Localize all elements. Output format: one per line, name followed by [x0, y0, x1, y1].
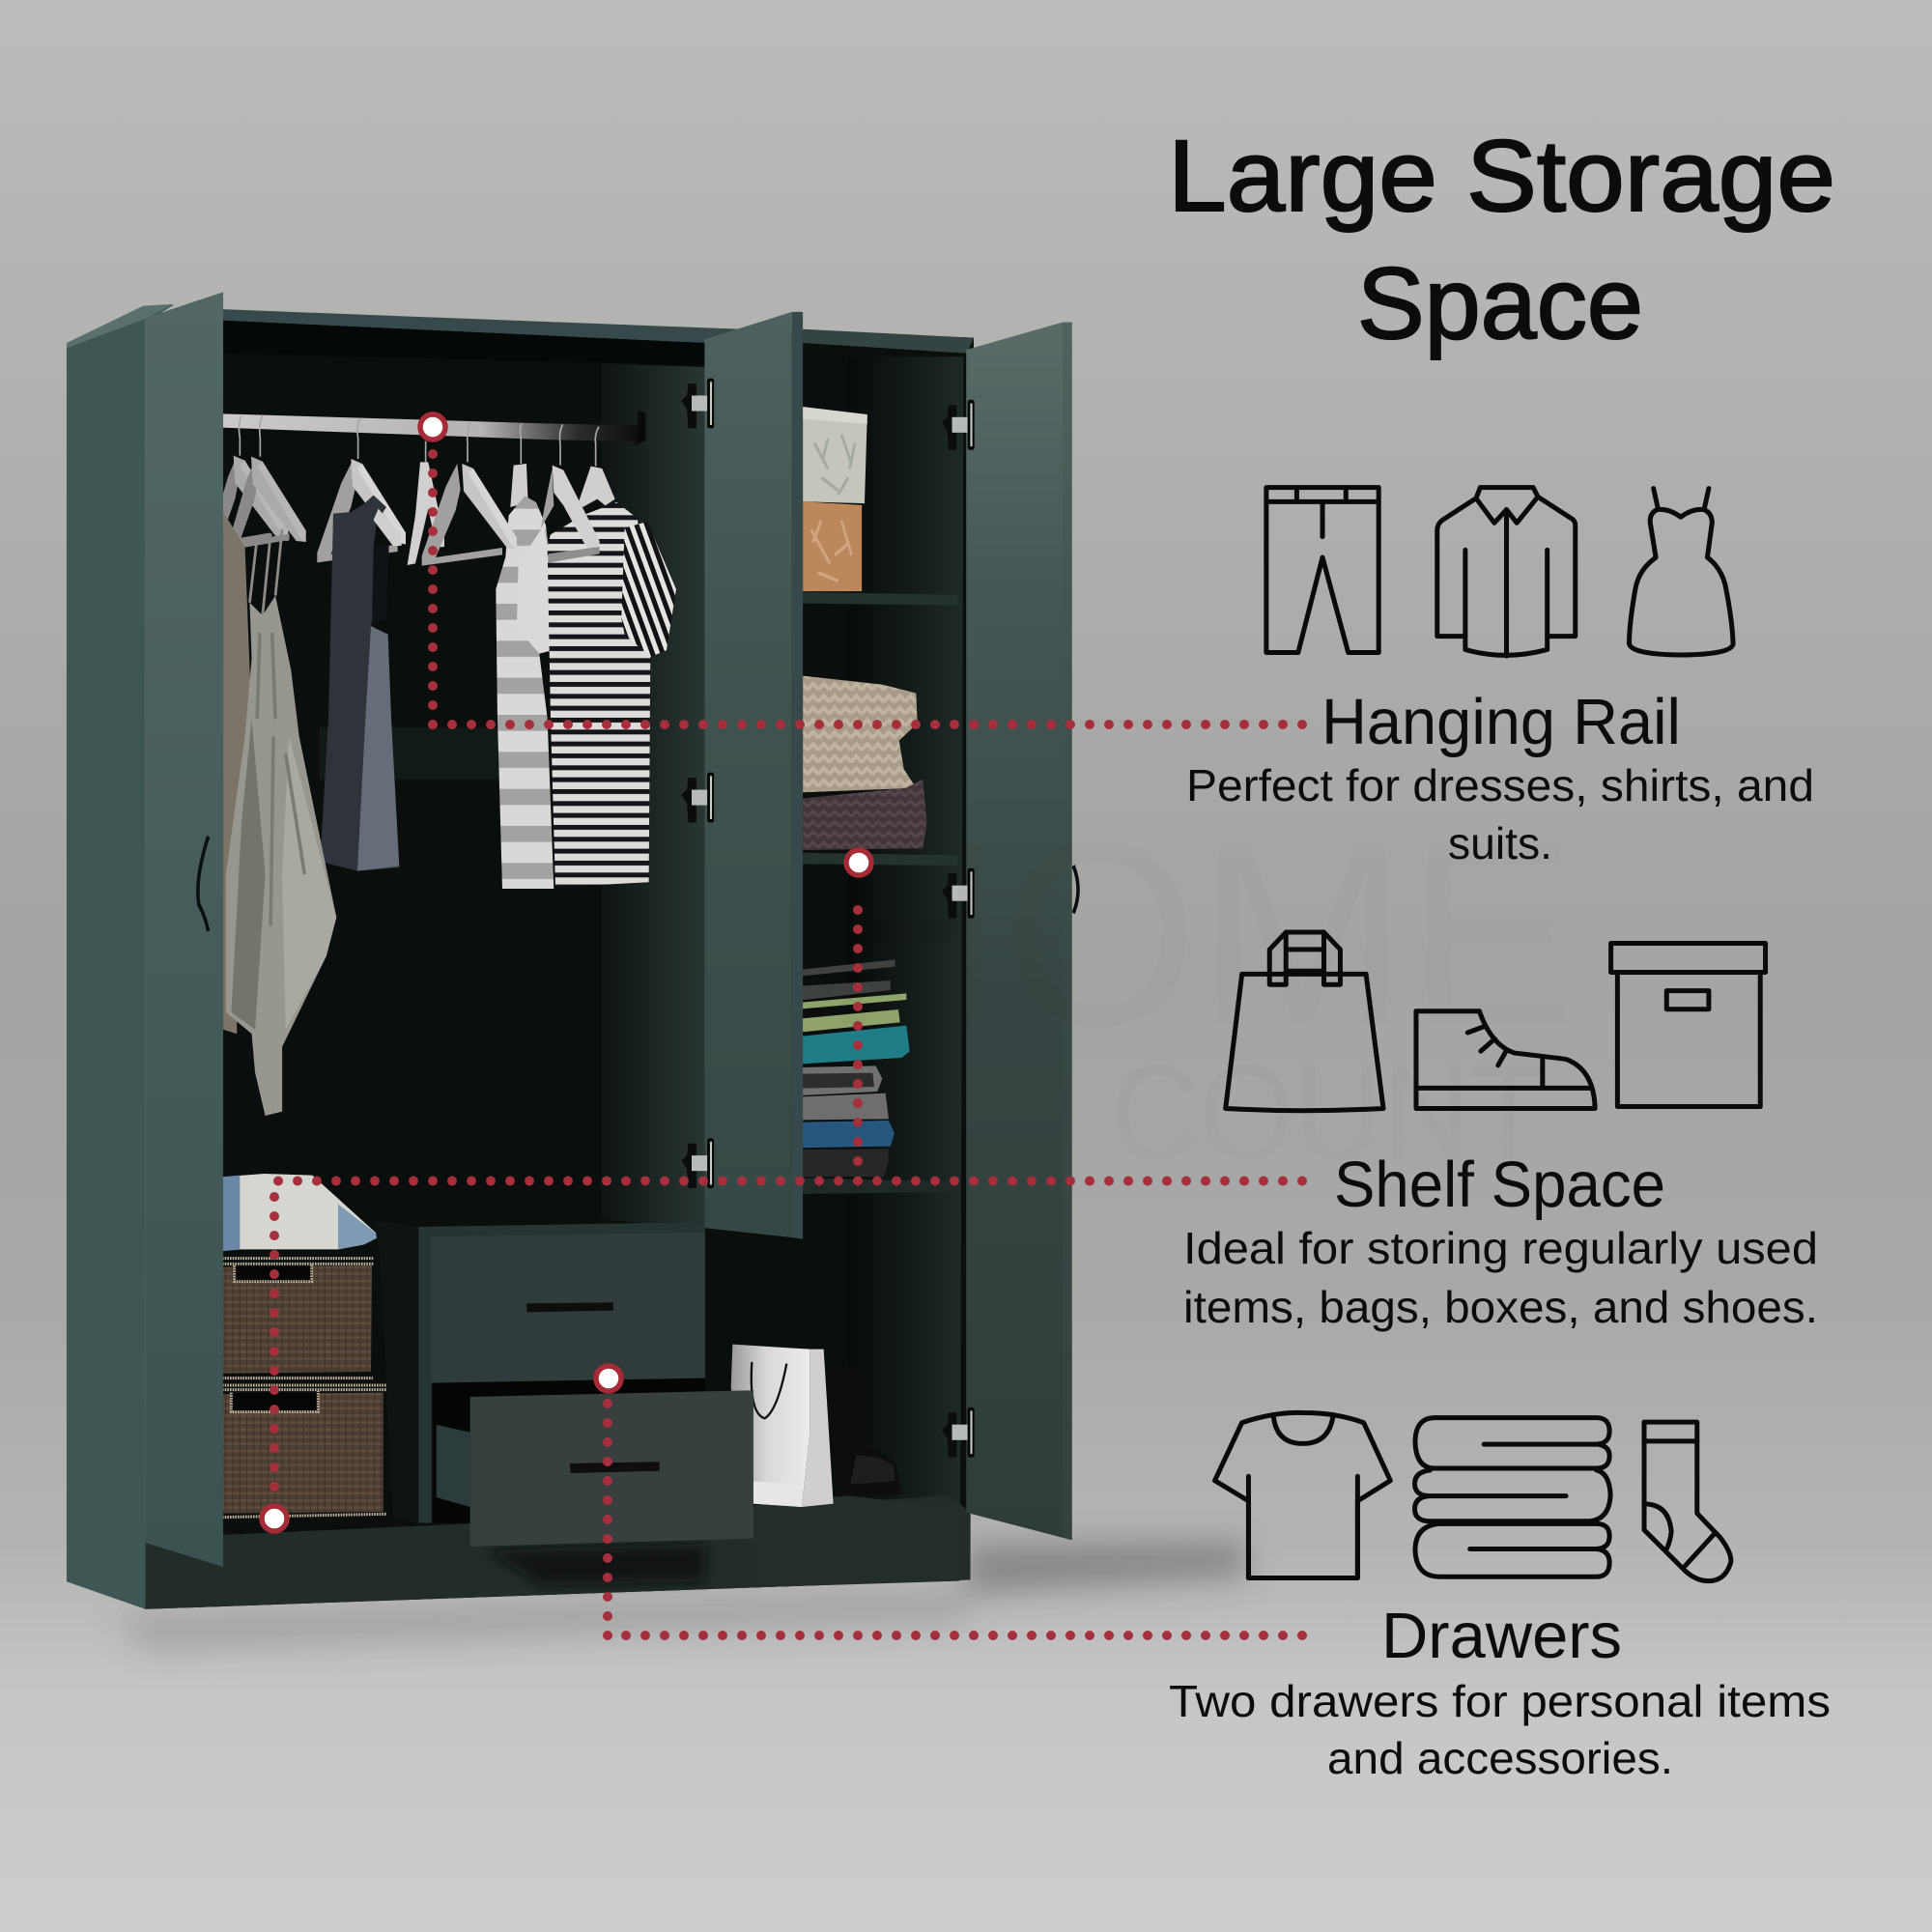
text: drawers description: Two drawers for personal items — [1169, 1676, 1831, 1726]
dotted leader: lower storage vertical — [270, 1197, 279, 1488]
heading: hanging rail: Hanging Rail — [1321, 686, 1681, 758]
upper drawer — [431, 1233, 705, 1383]
text: drawers description — [1169, 1676, 1831, 1783]
basket upper — [222, 1259, 374, 1374]
left door — [145, 292, 223, 1567]
text: shelf space description — [1183, 1223, 1818, 1332]
icon: folded towels — [1415, 1418, 1610, 1577]
brown garment — [223, 512, 252, 1034]
dotted leader: drawers vertical — [603, 1404, 612, 1636]
title — [1168, 120, 1835, 360]
side-on hanger — [408, 462, 444, 565]
bag and boot — [731, 1345, 959, 1587]
top board — [223, 309, 740, 343]
marker: lower storage — [262, 1506, 287, 1531]
lower compartment floor — [753, 1495, 959, 1587]
text: hanging rail description: suits. — [1448, 818, 1552, 868]
pale striped shirt — [496, 496, 554, 889]
drawer shadow — [486, 1544, 705, 1586]
hanger three — [317, 459, 406, 562]
icon: trousers — [1266, 488, 1378, 653]
front hanger — [422, 464, 517, 566]
shopping bag — [731, 1345, 834, 1507]
icon: t-shirt — [1215, 1412, 1390, 1577]
folded clothes stack — [802, 959, 958, 1194]
left side panel — [67, 304, 174, 1609]
basket lower — [222, 1378, 387, 1518]
hatbox — [803, 407, 867, 503]
boot — [826, 1365, 901, 1495]
dotted leader: hanging rail vertical — [428, 454, 438, 725]
drawer unit face — [418, 1222, 705, 1523]
wardrobe carcass in overview coordinates — [67, 304, 974, 1609]
knit blanket — [803, 676, 918, 792]
hinges — [681, 379, 975, 1458]
shopping back gap — [709, 1233, 848, 1517]
drawer unit frame — [374, 1220, 705, 1523]
drawer opening — [433, 1378, 705, 1523]
shelves — [803, 592, 958, 866]
floor shadow — [116, 1543, 1246, 1647]
dotted leader: drawers horizontal — [626, 1631, 1303, 1640]
right compartment wall — [848, 356, 963, 1547]
rail backing strip — [320, 727, 499, 780]
text: hanging rail description — [1186, 760, 1814, 868]
dotted leader: hanging rail horizontal — [433, 720, 1303, 729]
icon: shirt — [1437, 488, 1576, 656]
lower drawer — [437, 1390, 753, 1547]
middle door handle — [805, 866, 809, 913]
icon: dress — [1630, 489, 1733, 655]
wardrobe photo illustration — [67, 292, 1078, 1609]
icon: sock — [1644, 1422, 1731, 1581]
title: Large Storage — [1168, 120, 1835, 233]
hanger six and eight — [510, 464, 615, 507]
heading: shelf space: Shelf Space — [1334, 1149, 1665, 1221]
dotted leader: shelf horizontal — [278, 1177, 1303, 1186]
right door — [966, 323, 1078, 1540]
icon: tote bag — [1226, 932, 1383, 1111]
grey dress — [226, 529, 336, 1116]
left hangers — [210, 456, 306, 550]
hanger seven — [541, 466, 600, 563]
drawers and baskets — [222, 1174, 753, 1586]
pillow — [222, 1174, 380, 1251]
dotted leader: shelf vertical — [853, 910, 863, 1162]
text: drawers description: and accessories. — [1327, 1733, 1673, 1783]
hanging rail — [222, 411, 645, 446]
marker: shelf — [846, 850, 871, 875]
icon: storage box — [1611, 944, 1766, 1107]
heading: drawers: Drawers — [1381, 1600, 1622, 1672]
marker: drawers — [596, 1366, 621, 1391]
hanger three arm — [374, 509, 402, 546]
left garments and door in overview coordinates — [145, 292, 1078, 1567]
orange box — [803, 501, 862, 591]
right compartment top board — [803, 329, 974, 354]
title: Space — [1357, 247, 1643, 360]
lower floor board — [145, 1495, 970, 1609]
text: hanging rail description: Perfect for dresses, shirts, and — [1186, 760, 1814, 810]
middle door — [704, 312, 803, 1239]
black and white striped shirt — [548, 502, 650, 887]
marker: hanging rail — [420, 414, 445, 440]
rear shadow band — [223, 321, 704, 365]
hanging rail and clothes — [210, 411, 676, 889]
text: shelf space description: Ideal for storing regularly used — [1183, 1223, 1818, 1273]
icon: sneaker — [1416, 1011, 1595, 1108]
dark dress — [321, 496, 399, 871]
brown blanket — [803, 780, 927, 850]
shirt sleeve — [621, 522, 676, 657]
text: shelf space description: items, bags, boxes, and shoes. — [1183, 1282, 1818, 1332]
hanger hooks — [239, 415, 599, 467]
left compartment side wall — [601, 363, 704, 1228]
interior base — [145, 312, 974, 1609]
